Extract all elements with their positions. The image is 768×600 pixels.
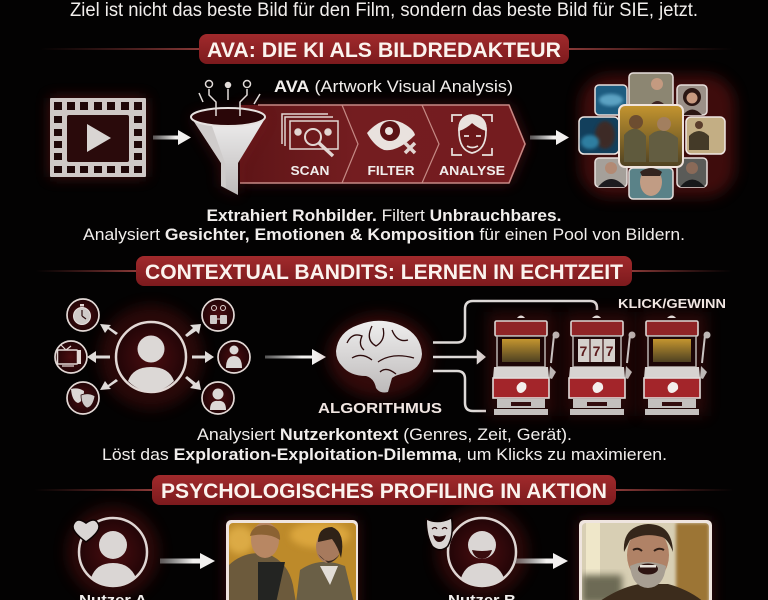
icon: stopwatch <box>67 299 99 331</box>
description: AVA <box>83 206 685 244</box>
photo: laughing man for user B <box>579 520 712 600</box>
icon: film strip with play button <box>50 98 146 177</box>
intro sentence: Ziel ist nicht das beste Bild für den Film, sondern das beste Bild für SIE, jetzt. <box>70 0 698 21</box>
description: Contextual Bandits <box>102 425 667 464</box>
label: analyse: ANALYSE <box>439 163 505 178</box>
banner title: AVA (Artwork Visual Analysis) <box>274 77 513 96</box>
arrow: user to algorithm <box>265 349 326 365</box>
icon: brain <box>328 314 432 398</box>
label: click and win: KLICK/GEWINN <box>618 296 726 311</box>
thumbnail: central film still <box>619 105 683 167</box>
section heading: Contextual Bandits: CONTEXTUAL BANDITS: LERNEN IN ECHTZEIT <box>145 261 623 284</box>
thumbnail: blue abstract <box>595 85 627 115</box>
thumbnail: bearded man <box>677 158 707 187</box>
arrow: user B to image <box>514 553 568 569</box>
section heading: AVA: AVA: DIE KI ALS BILDREDAKTEUR <box>207 39 561 62</box>
icon: user B with mask <box>427 506 528 598</box>
photo: film still for user A <box>226 520 358 600</box>
image pool collage <box>579 73 735 199</box>
arrow: banner to pool <box>530 130 569 145</box>
icon: people connected <box>202 299 234 331</box>
arrow: film to funnel <box>153 130 191 145</box>
reels: 777: 777 <box>580 343 614 359</box>
icon: eye with cross <box>367 120 415 153</box>
slot machine: left <box>488 312 560 416</box>
slot machine: right <box>639 312 710 416</box>
icon: professional person <box>218 341 250 373</box>
icon: central user <box>116 322 186 392</box>
thumbnail: man in suit <box>595 158 627 187</box>
user context diagram <box>55 299 250 414</box>
arrow: user A to image <box>160 553 215 569</box>
section heading: Psychological profiling: PSYCHOLOGISCHES PROFILING IN AKTION <box>161 480 607 503</box>
thumbnail: blue portrait <box>579 117 619 154</box>
label: algorithm: ALGORITHMUS <box>318 400 442 417</box>
icon: scan <box>282 114 338 156</box>
icon: funnel <box>191 80 266 195</box>
description: AVA: Extrahiert Rohbilder. Filtert Unbrauchbares. <box>206 206 562 225</box>
arrows from user <box>87 324 214 390</box>
thumbnail: man by lake <box>686 117 725 154</box>
icon: small user <box>202 382 234 414</box>
description: Contextual Bandits: Analysiert Nutzerkontext (Genres, Zeit, Gerät). <box>197 425 572 444</box>
section heading: Psychological profiling <box>34 475 734 505</box>
slot machine: middle with 777 <box>564 312 636 416</box>
section heading: Contextual Bandits <box>36 256 732 286</box>
section heading: AVA <box>40 34 733 64</box>
icon: face scan <box>452 115 492 155</box>
label: filter: FILTER <box>368 163 415 178</box>
banner: scan filter analyse <box>240 105 526 183</box>
thumbnail: woman portrait <box>629 168 673 199</box>
label: scan: SCAN <box>290 163 330 178</box>
icon: theatre masks <box>67 382 99 414</box>
description: Contextual Bandits: Löst das Exploration-Exploitation-Dilemma , um Klicks zu maximieren. <box>102 445 667 464</box>
arrows: algorithm to slot machines <box>433 301 597 411</box>
icon: user A with heart <box>67 506 159 598</box>
thumbnail: dark haired woman <box>677 85 707 115</box>
thumbnail: woman by water <box>629 73 673 113</box>
icon: television <box>55 341 87 373</box>
description: AVA: Analysiert Gesichter, Emotionen & Komposition für einen Pool von Bildern. <box>83 225 685 244</box>
